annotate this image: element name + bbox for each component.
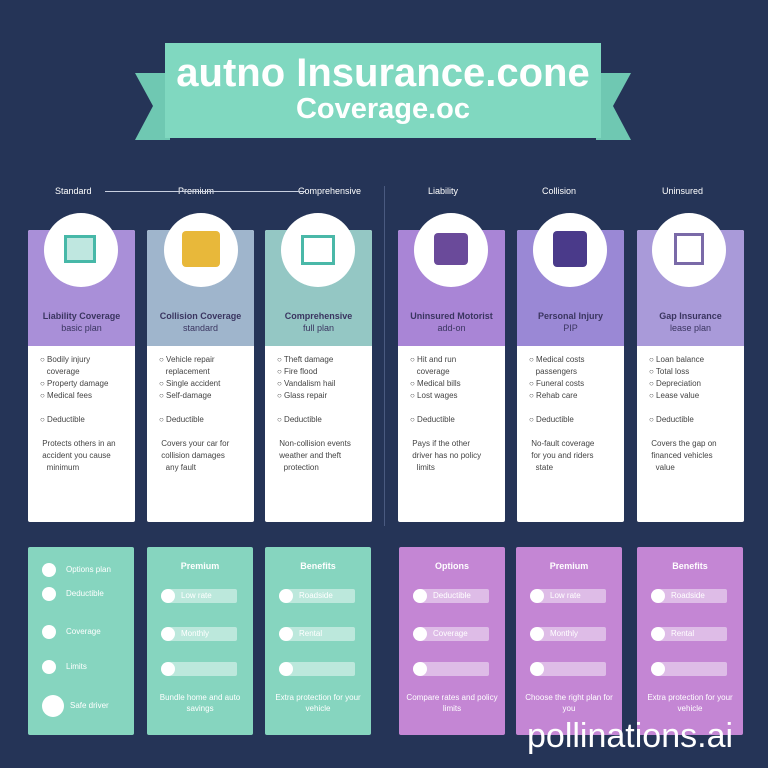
card 2: ○ Self-damage	[159, 391, 211, 400]
card 1: basic plan	[61, 323, 102, 333]
card 5: ○ Medical costs	[529, 355, 585, 364]
text: Low rate	[550, 591, 581, 600]
column labels: Collision	[542, 186, 576, 196]
text: Benefits	[672, 561, 708, 571]
card 5: passengers	[536, 367, 577, 376]
card 6: ○ Depreciation	[649, 379, 701, 388]
card 6: financed vehicles	[651, 451, 713, 460]
bottom panels purple	[399, 547, 505, 735]
card 6: ○ Total loss	[649, 367, 689, 376]
card 6: lease plan	[670, 323, 711, 333]
text: Monthly	[181, 629, 209, 638]
card 3: full plan	[303, 323, 334, 333]
card 2: ○ Single accident	[159, 379, 220, 388]
card 4: coverage	[417, 367, 450, 376]
card 5	[517, 230, 624, 522]
text: Rental	[299, 629, 322, 638]
bottom panels teal: Options plan	[66, 565, 111, 574]
card 4: ○ Hit and run	[410, 355, 456, 364]
card 6: ○ Lease value	[649, 391, 699, 400]
column labels	[55, 186, 703, 196]
card 3: ○ Vandalism hail	[277, 379, 336, 388]
card 3: Comprehensive	[285, 311, 352, 321]
bottom panels teal: Deductible	[66, 589, 104, 598]
card 2: Covers your car for	[161, 439, 229, 448]
card 3: ○ Fire flood	[277, 367, 317, 376]
text: Low rate	[181, 591, 212, 600]
title text: autno Insurance.cone	[176, 51, 590, 95]
card 6: value	[656, 463, 675, 472]
bottom panels purple: Options	[435, 561, 469, 571]
card 4: add-on	[437, 323, 466, 333]
text: Monthly	[550, 629, 578, 638]
bottom panels purple: Deductible	[433, 591, 471, 600]
card 6: Gap Insurance	[659, 311, 722, 321]
card 5: No-fault coverage	[531, 439, 594, 448]
bottom panels teal: Safe driver	[70, 701, 109, 710]
card 6: ○ Loan balance	[649, 355, 704, 364]
divider line	[384, 186, 385, 526]
card 2: collision damages	[161, 451, 225, 460]
card 4: ○ Medical bills	[410, 379, 461, 388]
card 6	[637, 230, 744, 522]
text: Roadside	[671, 591, 705, 600]
column labels: Liability	[428, 186, 458, 196]
card 6: Covers the gap on	[651, 439, 717, 448]
icon circles	[44, 213, 726, 287]
card 4: driver has no policy	[412, 451, 481, 460]
card 5: PIP	[563, 323, 578, 333]
card 2: ○ Deductible	[159, 415, 204, 424]
column labels: Premium	[178, 186, 214, 196]
bottom panels purple: Coverage	[433, 629, 468, 638]
text: Choose the right plan for you	[525, 693, 613, 713]
card 5: Personal Injury	[538, 311, 603, 321]
bottom panels teal	[28, 547, 134, 735]
column labels: Comprehensive	[298, 186, 361, 196]
card 4: limits	[417, 463, 435, 472]
subtitle: Coverage.oc	[296, 93, 470, 125]
card 1: Protects others in an	[42, 439, 116, 448]
card 2: ○ Vehicle repair	[159, 355, 215, 364]
text: Benefits	[300, 561, 336, 571]
card 4	[398, 230, 505, 522]
card 4: Uninsured Motorist	[410, 311, 493, 321]
text: Premium	[181, 561, 219, 571]
card 3: ○ Glass repair	[277, 391, 327, 400]
bottom panels purple: Compare rates and policy limits	[406, 693, 498, 713]
card 1: Liability Coverage	[43, 311, 120, 321]
card 4: Pays if the other	[412, 439, 470, 448]
text: Premium	[550, 561, 588, 571]
card 1: ○ Property damage	[40, 379, 108, 388]
title banner	[135, 43, 631, 140]
card 4: ○ Deductible	[410, 415, 455, 424]
text: Bundle home and auto savings	[160, 693, 240, 713]
card 1: accident you cause	[42, 451, 111, 460]
card 1: coverage	[47, 367, 80, 376]
card 6: ○ Deductible	[649, 415, 694, 424]
text: Rental	[671, 629, 694, 638]
text: Extra protection for your vehicle	[647, 693, 733, 713]
card 1: ○ Bodily injury	[40, 355, 90, 364]
bottom panels teal: Limits	[66, 662, 87, 671]
card 2	[147, 230, 254, 522]
card 1: ○ Deductible	[40, 415, 85, 424]
card 3	[265, 230, 372, 522]
card 5: ○ Funeral costs	[529, 379, 584, 388]
card 3: protection	[284, 463, 319, 472]
card 2: any fault	[166, 463, 196, 472]
watermark: pollinations.ai	[527, 717, 733, 755]
card 5: ○ Rehab care	[529, 391, 577, 400]
text: Extra protection for your vehicle	[275, 693, 361, 713]
card 3: ○ Theft damage	[277, 355, 333, 364]
card 5: for you and riders	[531, 451, 593, 460]
column labels: Standard	[55, 186, 92, 196]
card 2: replacement	[166, 367, 210, 376]
bottom panels teal: Coverage	[66, 627, 101, 636]
card 5: state	[536, 463, 553, 472]
card 1: minimum	[47, 463, 79, 472]
card 2: standard	[183, 323, 218, 333]
card 5: ○ Deductible	[529, 415, 574, 424]
card 3: Non-collision events	[279, 439, 351, 448]
column labels: Uninsured	[662, 186, 703, 196]
card 1: ○ Medical fees	[40, 391, 92, 400]
card 2: Collision Coverage	[160, 311, 241, 321]
card 3: weather and theft	[279, 451, 341, 460]
card 3: ○ Deductible	[277, 415, 322, 424]
text: Roadside	[299, 591, 333, 600]
card 1	[28, 230, 135, 522]
card 4: ○ Lost wages	[410, 391, 458, 400]
